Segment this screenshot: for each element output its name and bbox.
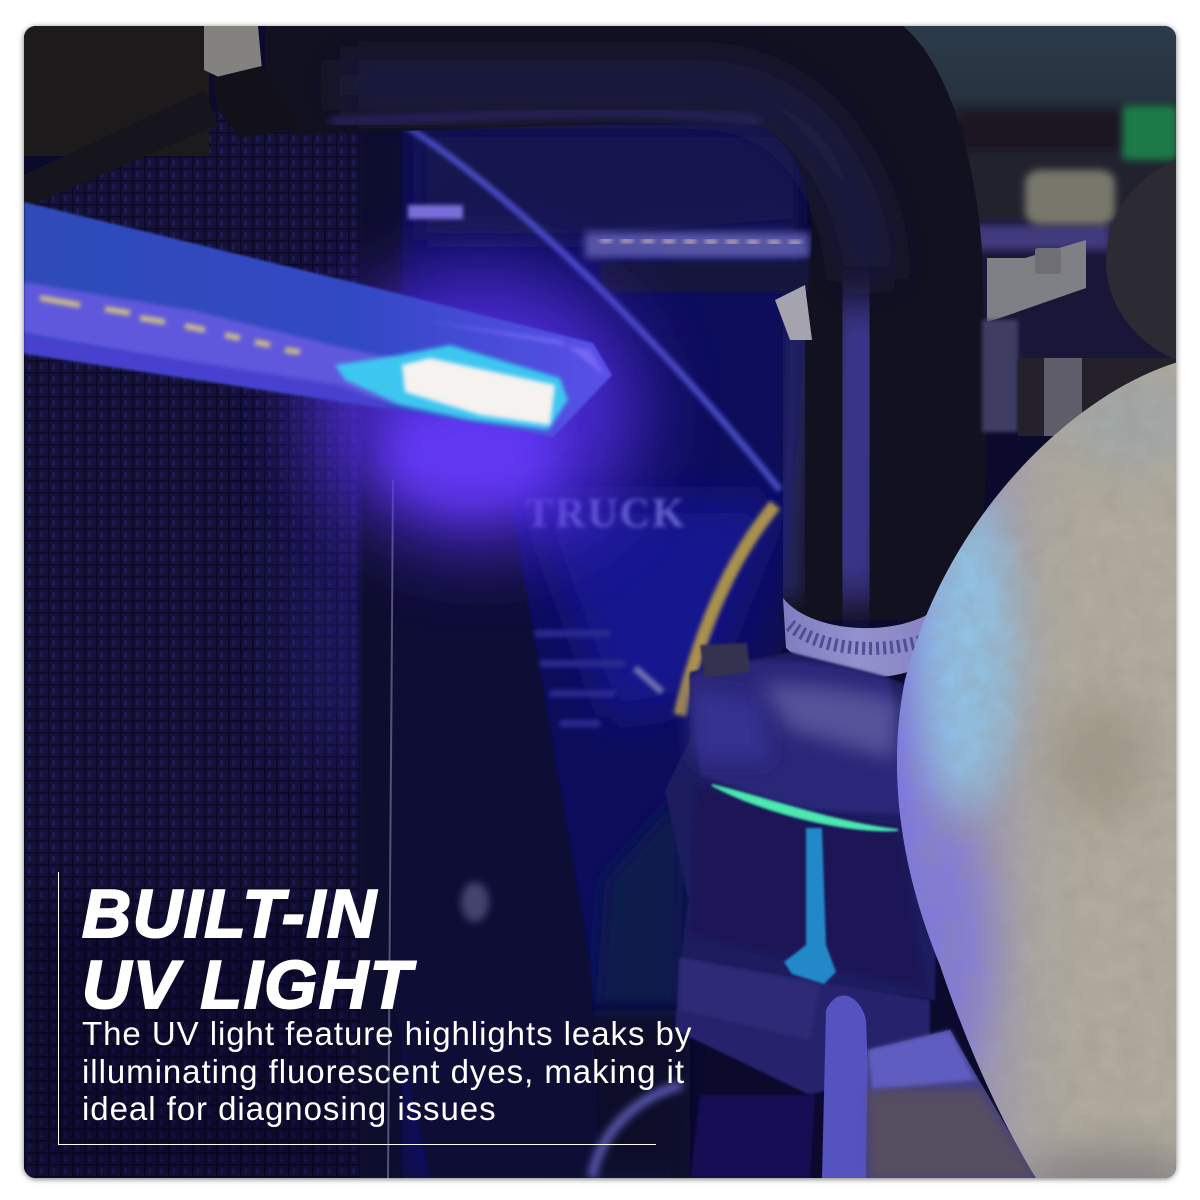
hose clamp [783, 598, 932, 678]
top left clamp [24, 26, 298, 208]
dark bracket [392, 470, 600, 1178]
caption frame lines [58, 872, 656, 1145]
strip of blurred parts behind hose [408, 205, 810, 292]
title: UV LIGHT [82, 947, 413, 1023]
dark side strip [360, 130, 400, 1180]
UV wand light [24, 202, 612, 437]
lower left arc shape [592, 1085, 682, 1178]
title [82, 876, 418, 1023]
body text: ideal for diagnosing issues [82, 1090, 497, 1127]
upper right engine bay [900, 26, 1180, 360]
upper hose [265, 26, 987, 620]
body text: illuminating fluorescent dyes, making it [82, 1052, 685, 1090]
wide UV halo [320, 270, 640, 550]
housing block [665, 643, 1036, 1178]
body text [82, 1015, 692, 1127]
body text: The UV light feature highlights leaks by [82, 1015, 692, 1052]
expansion tank [897, 362, 1176, 1178]
sign text: TRUCK [525, 491, 687, 537]
metal bracket right of hose [775, 240, 1178, 436]
fluorescent leak line [712, 785, 898, 984]
radiator grille [24, 110, 390, 1180]
blue wire [405, 125, 780, 490]
title: BUILT-IN [82, 876, 378, 952]
background centre panel [400, 125, 800, 1180]
sign small text lines [535, 630, 662, 727]
yellow cable [680, 505, 775, 715]
